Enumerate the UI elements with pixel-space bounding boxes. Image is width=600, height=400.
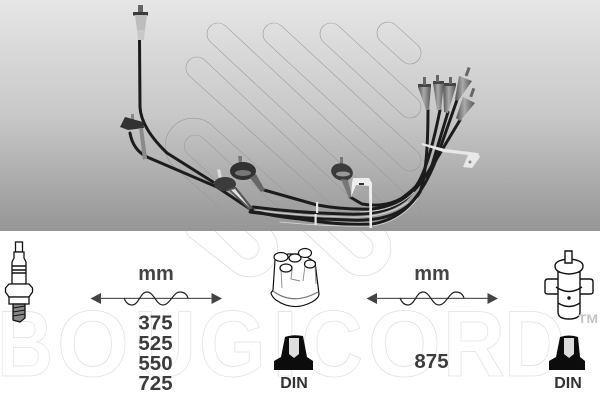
top boot [133, 5, 148, 40]
watermark loops on photo [165, 22, 422, 204]
watermark wordmark BOUGICORD: R [443, 291, 505, 396]
double arrow with wavy wire right [366, 292, 498, 305]
watermark wordmark BOUGICORD [0, 291, 565, 396]
lengths list: 525 [138, 332, 173, 355]
watermark wordmark BOUGICORD: U [134, 291, 196, 396]
watermark wordmark BOUGICORD: I [272, 291, 298, 396]
lengths list: 725 [138, 372, 173, 395]
right mid boot [329, 157, 355, 198]
wires [130, 40, 460, 226]
right length symbol [366, 263, 498, 305]
icon: distributor cap [271, 248, 319, 307]
white clip [351, 178, 372, 228]
ignition wire set photo [120, 5, 480, 228]
watermark wordmark BOUGICORD: D [504, 291, 565, 396]
white bracket [422, 143, 480, 168]
watermark loops on white [186, 231, 392, 278]
icon: DIN connector right [549, 336, 585, 370]
label: DIN right: DIN [554, 375, 582, 392]
trademark: TM [578, 312, 598, 326]
lengths list: 375 [138, 312, 173, 334]
icon: ignition coil [545, 251, 593, 319]
label: mm: mm [138, 263, 174, 285]
photo background panel [0, 0, 600, 231]
lengths list [138, 312, 173, 395]
label: mm right: mm [414, 263, 450, 285]
lengths list: 550 [138, 352, 173, 375]
left bracket boot [120, 114, 147, 160]
icon: spark plug [6, 242, 32, 322]
double arrow with wavy wire [90, 292, 222, 305]
watermark wordmark BOUGICORD: O [57, 291, 129, 396]
label: DIN left: DIN [280, 375, 308, 392]
right boots [418, 67, 475, 121]
middle boot left [214, 169, 253, 210]
icon: DIN connector left [274, 335, 313, 370]
cable straps [314, 202, 318, 225]
watermark wordmark BOUGICORD: C [301, 291, 363, 396]
length 875: 875 [414, 350, 449, 373]
left length symbol [90, 263, 222, 305]
middle boot right [230, 156, 265, 192]
watermark wordmark BOUGICORD: O [368, 291, 441, 396]
watermark wordmark BOUGICORD: G [199, 291, 266, 396]
